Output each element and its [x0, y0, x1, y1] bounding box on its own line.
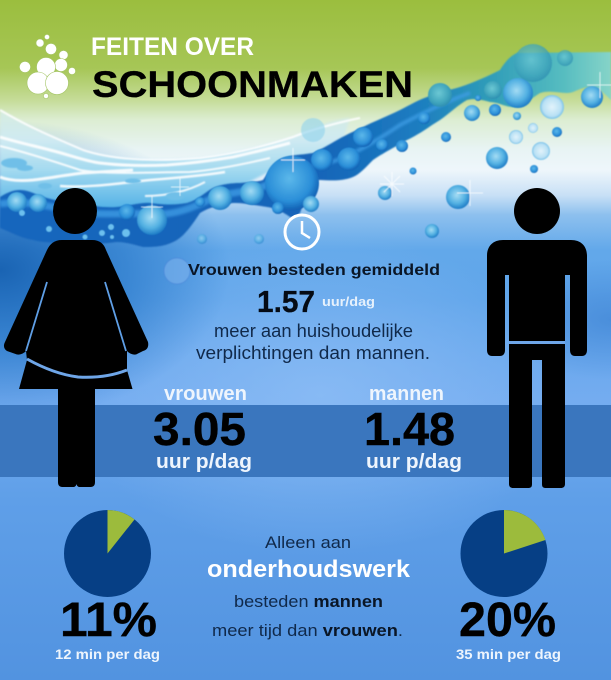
icon: soap bubbles: [19, 34, 76, 99]
icon: clock: [285, 215, 319, 249]
headline text: verplichtingen dan mannen.: [196, 343, 430, 363]
stat: 11%: 12 min per dag: [55, 647, 160, 662]
stat: mannen: mannen: [369, 383, 444, 405]
title: FEITEN OVER: [91, 33, 254, 61]
stat: mannen: [364, 383, 462, 473]
stat: 11%: 11%: [60, 594, 157, 647]
headline text: 1.57: [257, 284, 315, 319]
title: SCHOONMAKEN: [92, 64, 413, 105]
band behind the numbers: [0, 405, 611, 477]
bubbles: [7, 44, 611, 284]
stat: mannen: uur p/dag: [366, 451, 462, 473]
deep water and crest: [0, 52, 611, 247]
icon: man: [487, 188, 587, 488]
stat: vrouwen: uur p/dag: [156, 451, 252, 473]
foam streaks: [0, 110, 360, 196]
arm gaps: [26, 282, 126, 351]
stat: 20%: 35 min per dag: [456, 647, 561, 662]
stat: vrouwen: vrouwen: [164, 383, 247, 405]
pie chart: 20%: [460, 510, 548, 597]
waist line: [27, 359, 127, 377]
stat: 20%: 20%: [459, 594, 556, 647]
maintenance text: besteden mannen: [234, 592, 383, 611]
water wave: [0, 52, 611, 247]
headline text: meer aan huishoudelijke: [214, 321, 413, 341]
water inner highlights: [0, 93, 470, 214]
foam patches: [1, 158, 184, 200]
maintenance text: Alleen aan: [265, 533, 351, 552]
stat: vrouwen: 3.05: [153, 403, 246, 455]
foam layer: [0, 110, 350, 215]
icon: woman: [4, 188, 148, 487]
stat: vrouwen: [153, 383, 252, 473]
stat: mannen: 1.48: [364, 403, 455, 455]
headline text: [188, 262, 440, 363]
maintenance text: onderhoudswerk: [207, 556, 411, 583]
belt line: [509, 341, 565, 344]
headline text: uur/dag: [322, 294, 375, 309]
sparkles: [141, 72, 611, 218]
headline text: Vrouwen besteden gemiddeld: [188, 262, 440, 279]
title: [91, 33, 413, 105]
maintenance text: meer tijd dan vrouwen .: [212, 621, 403, 640]
maintenance text: [207, 533, 411, 640]
pie chart: 11%: [64, 510, 151, 597]
stat: 11%: [55, 594, 160, 662]
